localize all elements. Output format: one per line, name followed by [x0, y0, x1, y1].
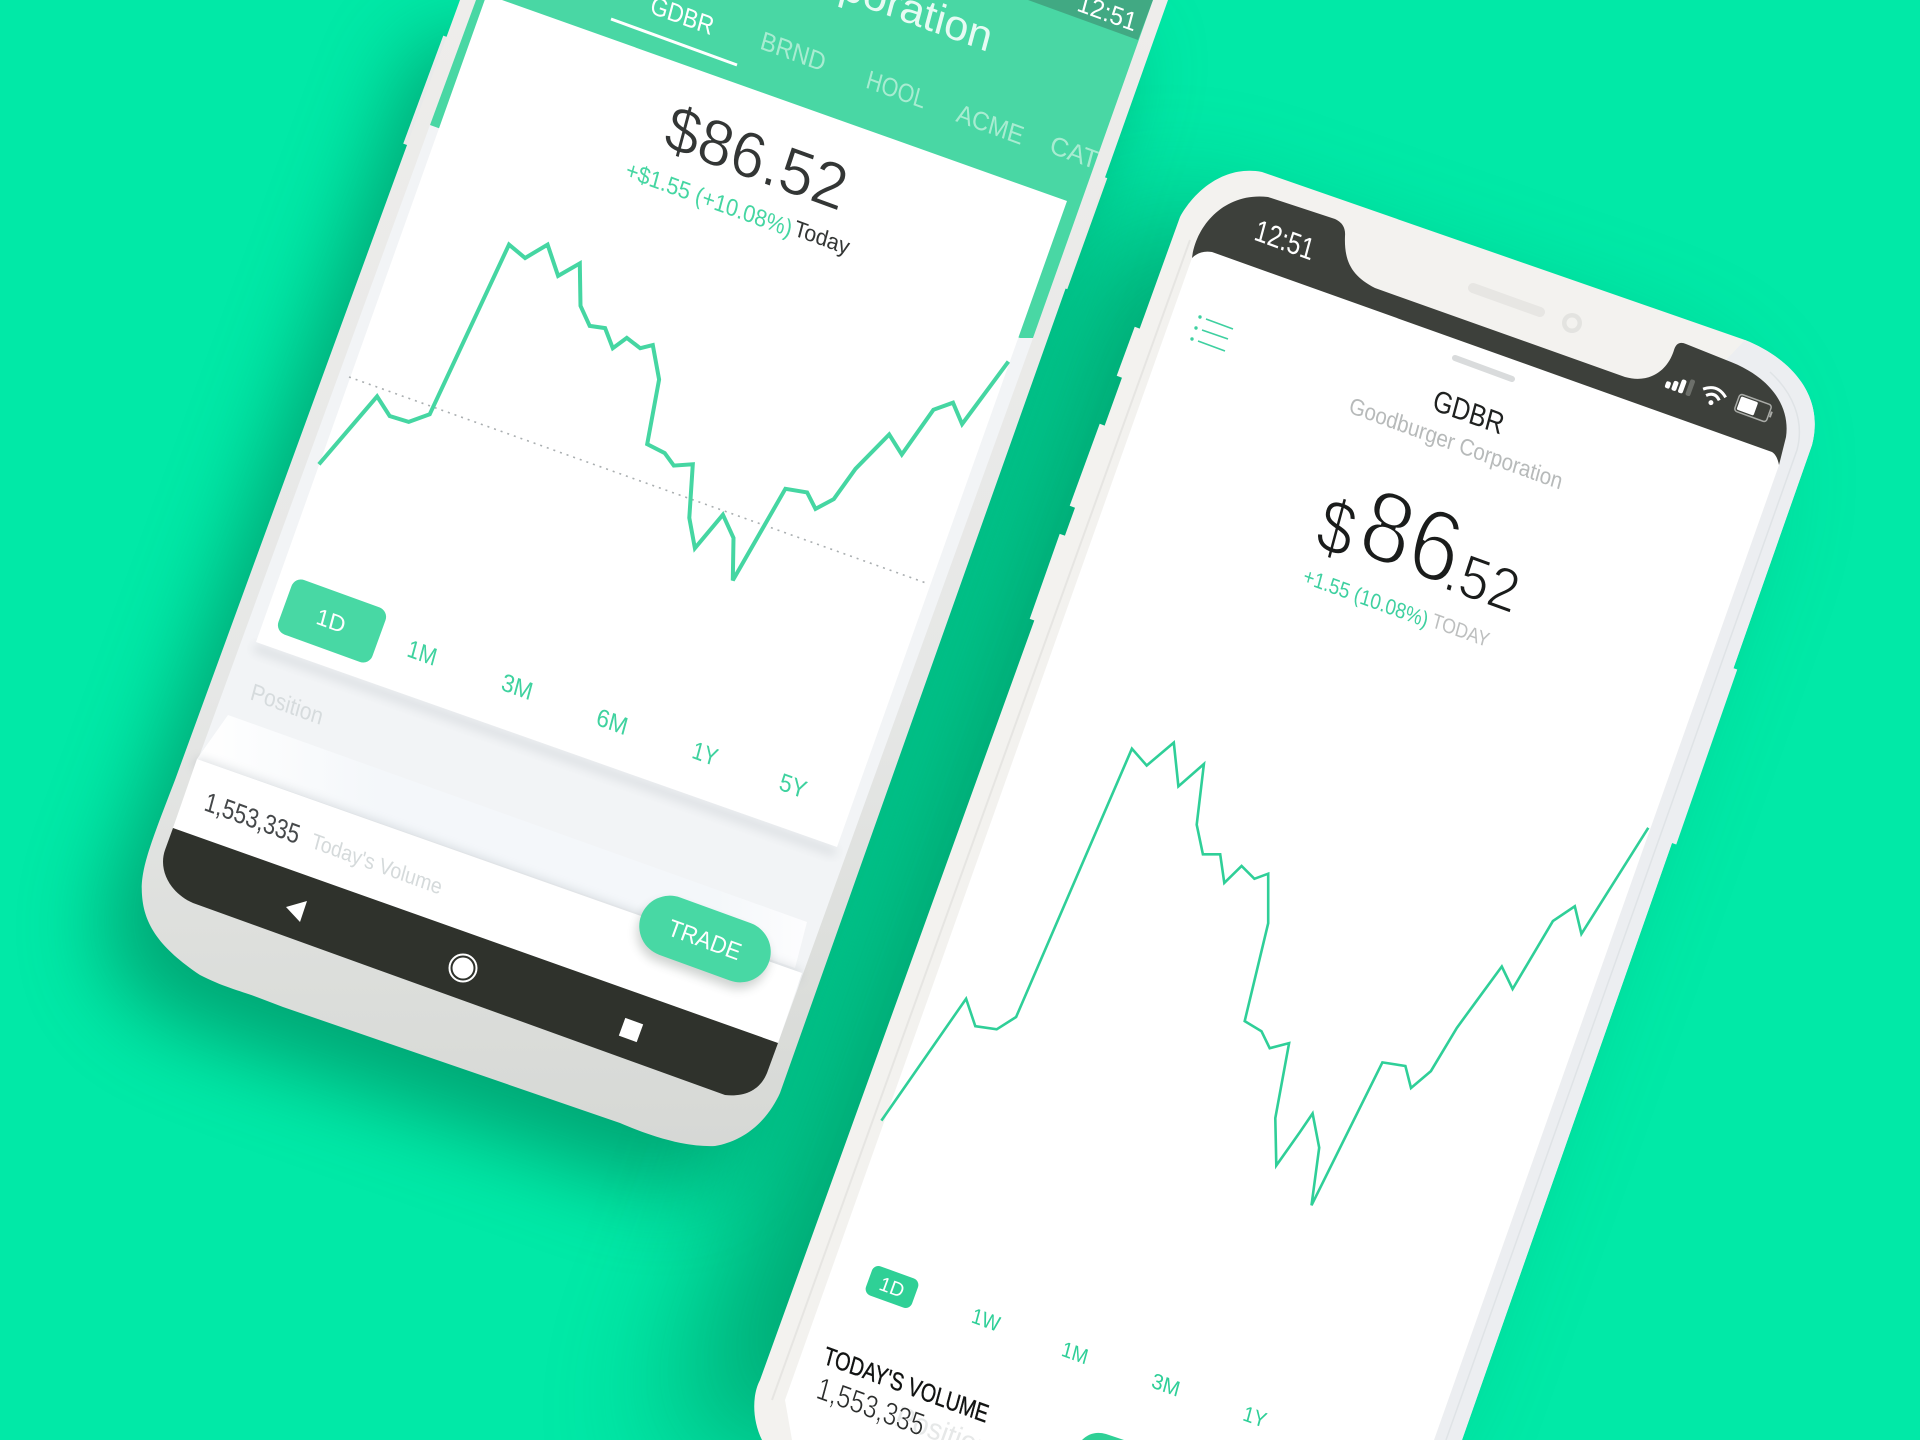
bezel line left [772, 240, 1190, 1400]
price [1309, 465, 1527, 627]
price chart [319, 245, 1008, 580]
price: $86.52 [658, 90, 855, 225]
screen background [173, 0, 1153, 1043]
change: +$1.55 (+10.08%) [623, 156, 795, 242]
today label: TODAY [1429, 610, 1492, 652]
sub-card: position [197, 715, 807, 968]
range 3M: 3M [498, 668, 536, 706]
phone body [754, 171, 1815, 1440]
navigation bar [163, 828, 778, 1095]
icon: back triangle [286, 901, 307, 922]
top dark bar with notch [1192, 196, 1787, 465]
dollar sign: $ [1309, 482, 1364, 575]
side button left [407, 37, 447, 145]
price chart [881, 743, 1648, 1205]
range 6M: 6M [593, 703, 631, 741]
lens [1566, 318, 1578, 328]
lens ring [1562, 313, 1582, 333]
volume value: 1,553,335 [201, 786, 303, 850]
menu lines [1198, 319, 1233, 351]
right phone [754, 171, 1815, 1440]
speaker [1473, 288, 1540, 312]
button label: 1D [314, 603, 349, 638]
tab CAT: CAT [1047, 130, 1101, 176]
icon: wifi [1699, 384, 1727, 409]
side button left 1 [1120, 328, 1138, 377]
range 1W: 1W [969, 1304, 1003, 1337]
volume label: Today's Volume [309, 829, 445, 900]
range 1M: 1M [1059, 1337, 1091, 1370]
trade button peek [1082, 1433, 1124, 1440]
range button 1D [864, 1264, 920, 1310]
bar 2 [1671, 380, 1679, 391]
sheet handle [1455, 358, 1512, 379]
cents: .52 [1438, 536, 1527, 627]
bottom sheet shadow [193, 757, 802, 982]
side button right [1672, 668, 1733, 843]
tab ACME: ACME [953, 99, 1027, 151]
range 1Y: 1Y [1240, 1402, 1269, 1433]
trade button shadow [628, 894, 777, 997]
tab underline [611, 19, 737, 65]
side button left 2 [1073, 425, 1103, 507]
shadow: left phone [104, 42, 1130, 1188]
range 5Y: 5Y [776, 768, 810, 805]
battery outline [1734, 394, 1772, 422]
wifi dot [1708, 399, 1714, 406]
tab HOOL: HOOL [863, 65, 929, 115]
trade button [631, 887, 779, 991]
header fill [430, 0, 1153, 338]
tab BRND: BRND [757, 26, 829, 78]
range 3M: 3M [1149, 1369, 1182, 1402]
ticker: GDBR [1429, 384, 1507, 442]
status time: 12:51 [1251, 214, 1318, 268]
baseline dotted [349, 377, 926, 583]
button label: 1D [876, 1273, 907, 1303]
status bar [1028, 0, 1153, 40]
shadow: right phone [664, 216, 1725, 1440]
icon: recents square [619, 1018, 643, 1042]
side button right [1064, 177, 1104, 288]
company name: Goodburger Corporation [1346, 393, 1565, 495]
range button 1D [275, 577, 389, 665]
dot [452, 958, 474, 978]
battery fill [1737, 396, 1758, 416]
header band [430, 0, 1153, 338]
screen [785, 252, 1779, 1440]
left phone [142, 0, 1200, 1146]
trade label: TRADE [664, 915, 745, 966]
chart card [256, 0, 1067, 847]
right bezel tint [1434, 340, 1815, 1440]
camera [1562, 313, 1582, 333]
ring [450, 954, 476, 982]
volume heading: TODAY'S VOLUME [821, 1342, 991, 1429]
range 1Y: 1Y [689, 736, 721, 772]
button shape [864, 1264, 920, 1310]
change: +1.55 (10.08%) [1301, 564, 1431, 633]
bottom sheet [173, 759, 802, 1043]
range 1M: 1M [404, 635, 440, 672]
outer arc [1703, 384, 1727, 397]
position label: Position [248, 678, 326, 730]
menu dots [1190, 315, 1202, 341]
chart card shadow [253, 644, 837, 856]
battery cap [1769, 411, 1773, 418]
inner arc [1706, 392, 1720, 400]
bar 4 [1685, 379, 1696, 397]
icon: battery [1734, 394, 1775, 423]
trade shape [631, 887, 779, 991]
today label: Today [791, 215, 853, 260]
bar 1 [1664, 381, 1671, 389]
side button left 3 [1033, 535, 1063, 620]
icon: signal [1664, 371, 1696, 397]
phone body [142, 0, 1168, 1146]
icon: menu [1190, 315, 1233, 351]
bar 3 [1678, 379, 1687, 394]
button shape [275, 577, 389, 665]
bezel line [1446, 372, 1799, 1440]
dollars: 86 [1349, 465, 1474, 609]
icon: home circle [450, 954, 476, 982]
